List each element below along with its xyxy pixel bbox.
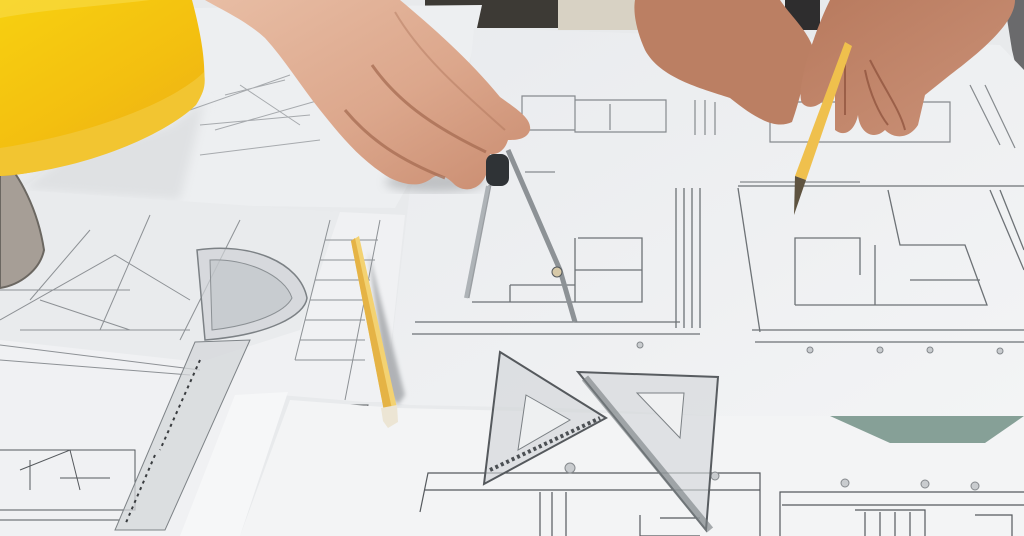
- hand: finger creases: [345, 12, 505, 178]
- plan: right floor plan: [738, 186, 1024, 342]
- set square triangle small: [484, 352, 606, 484]
- sheet: left plans: [0, 190, 405, 536]
- hand: back of hand: [801, 0, 1015, 136]
- plan: centre floor plan: [412, 185, 700, 334]
- right hand at back: [634, 0, 812, 125]
- set square triangle large: [578, 372, 718, 530]
- shadow under hand: [385, 172, 485, 192]
- glass object at left edge: [0, 155, 44, 288]
- protractor: [197, 248, 307, 340]
- sheet: top-left drawing: [20, 5, 482, 208]
- yellow hard hat: [0, 0, 205, 176]
- plan: top middle: [522, 85, 1015, 182]
- sheet: lower right plans: [240, 342, 1024, 536]
- hand: silhouette of palm and fingers: [205, 0, 530, 189]
- ruler: [115, 340, 250, 530]
- left hand with compass: [205, 0, 530, 189]
- drafting compass: [466, 150, 575, 322]
- yellow pencil on desk: [351, 236, 405, 428]
- right hand holding pencil: [801, 0, 1015, 136]
- paper strip lower left: [180, 392, 288, 536]
- sheet: main upper-right plans: [385, 28, 1024, 416]
- yellow pencil in hand: [794, 42, 852, 215]
